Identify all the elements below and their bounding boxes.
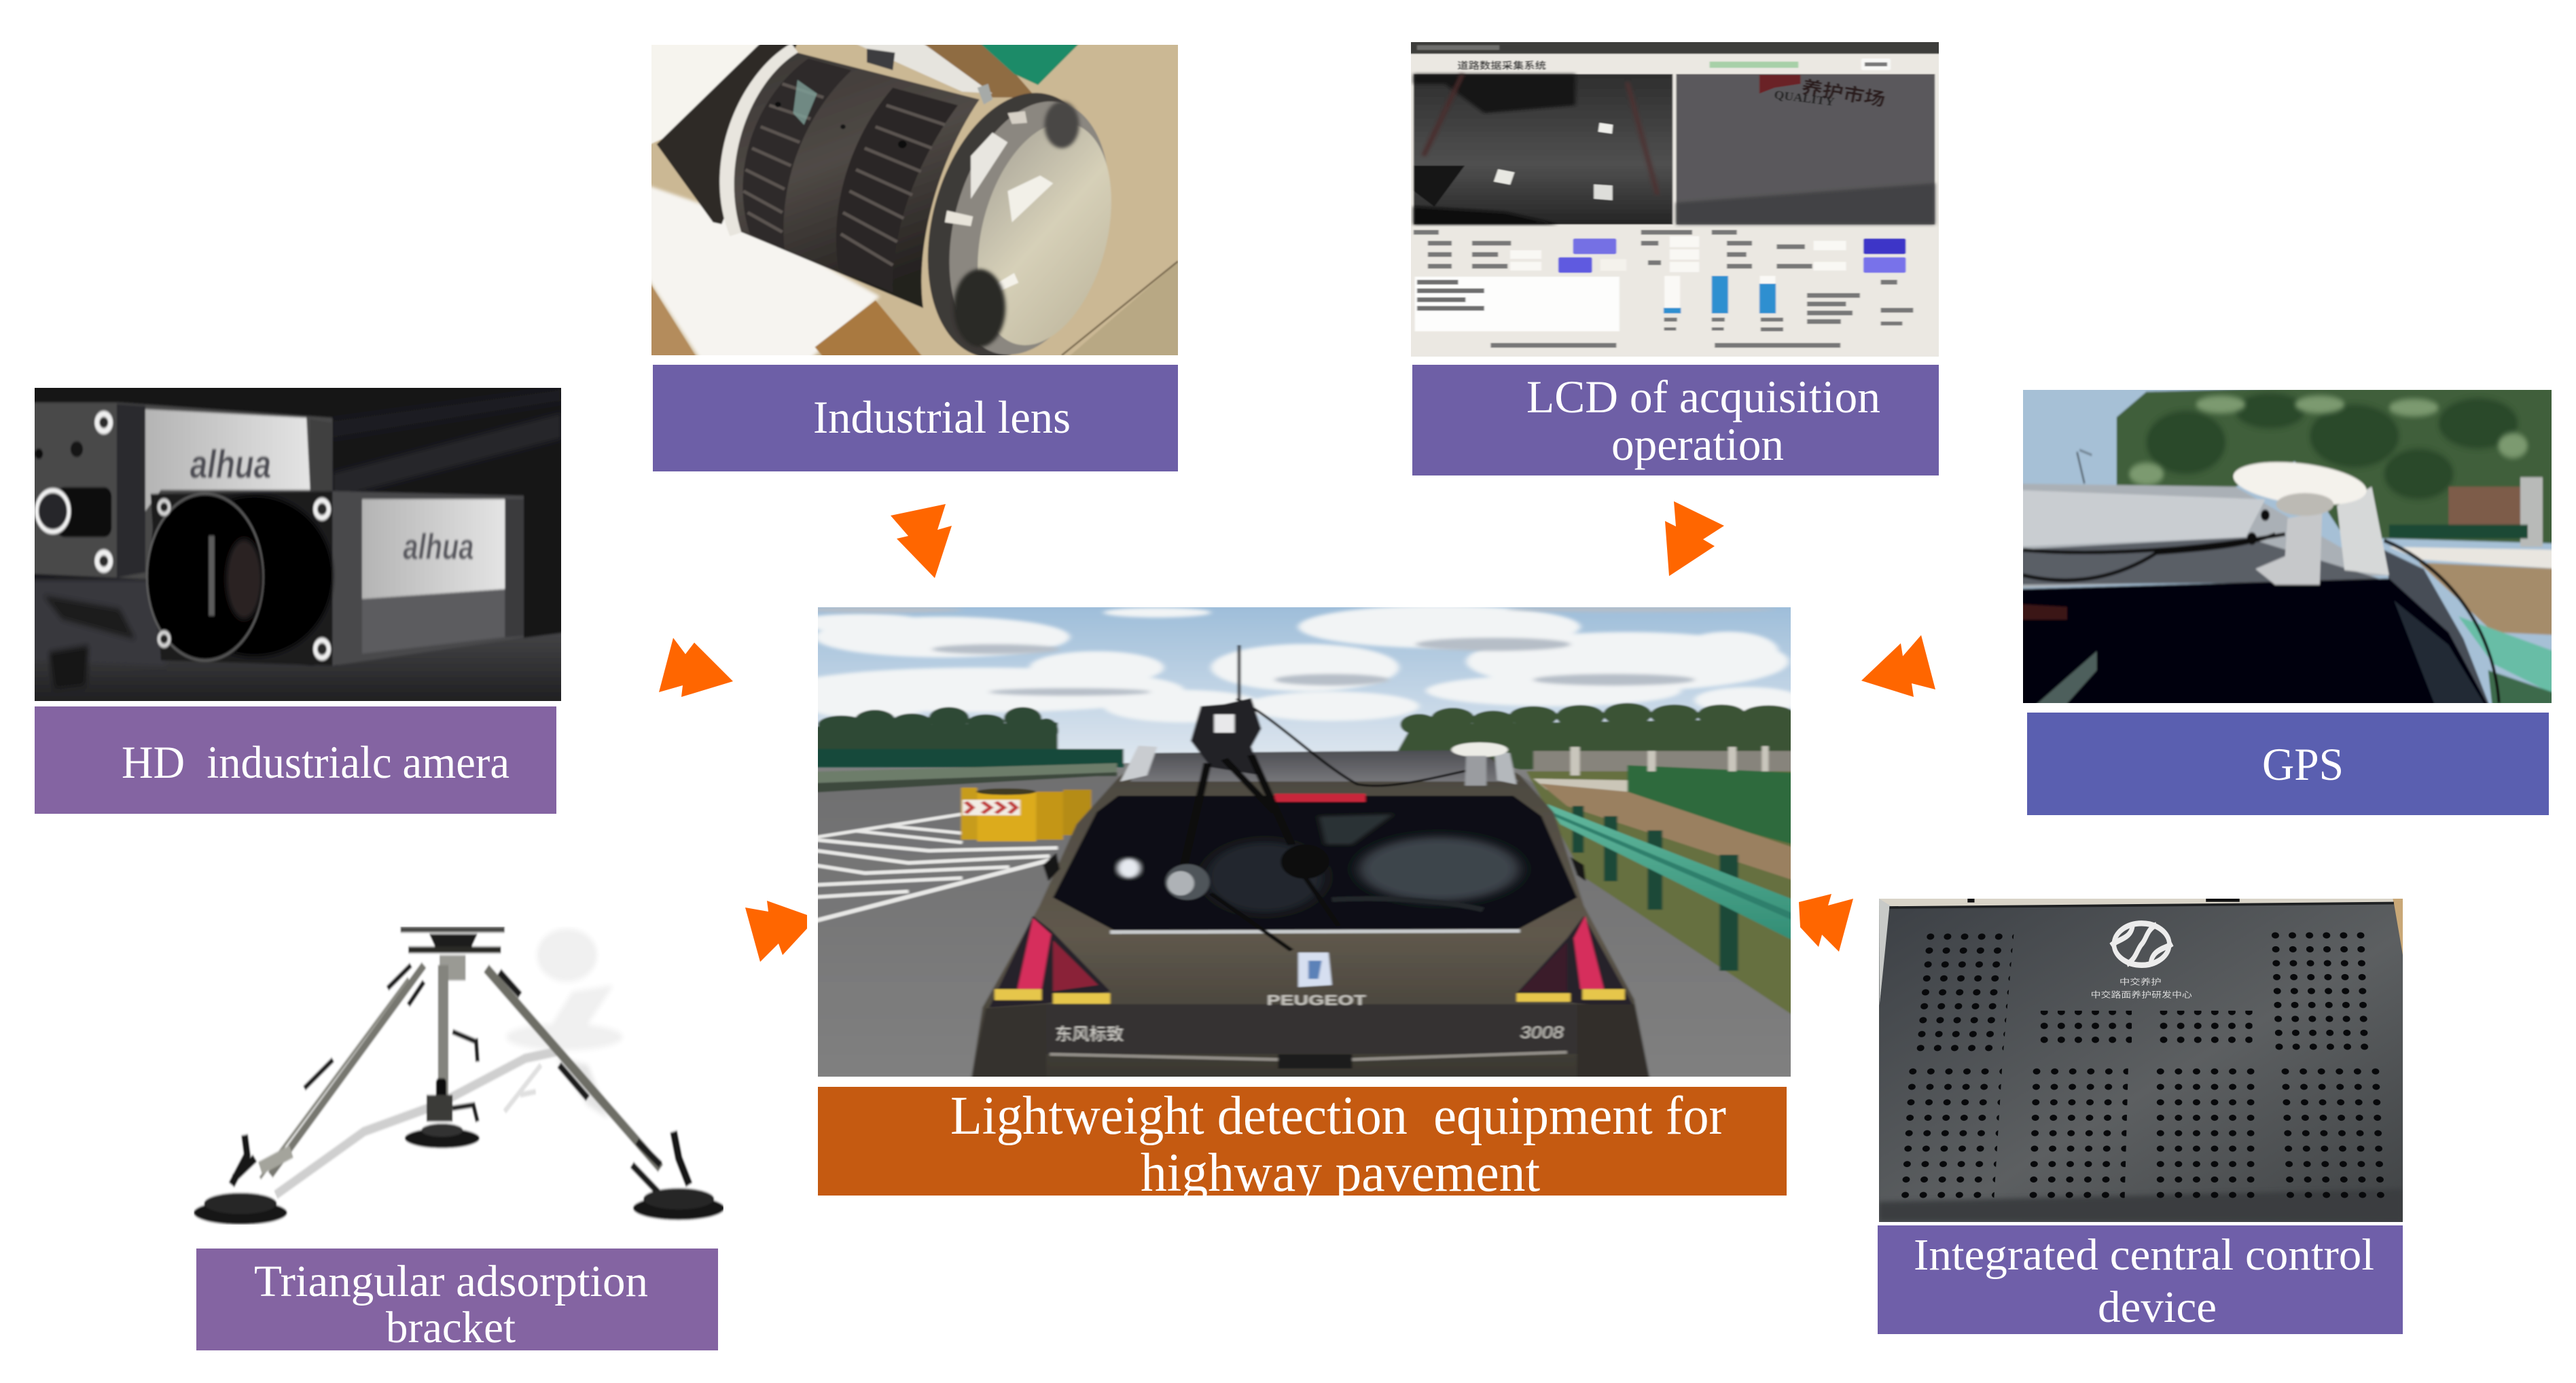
title: lightweight detection equipment for highway pavement xyxy=(818,1086,1787,1203)
panel: integrated central control device xyxy=(1878,899,2403,1334)
label: integrated central control device: device xyxy=(2098,1282,2217,1332)
panel: GPS xyxy=(2013,379,2562,815)
photo: HD industrial camera: alhua xyxy=(403,527,473,567)
photo: control device xyxy=(1879,899,2403,1222)
photo: GPS antenna on car roof xyxy=(2023,390,2552,703)
panel: central lightweight detection equipment xyxy=(781,596,1809,1203)
photo: control device: 中交养护 xyxy=(2119,976,2162,987)
title: lightweight detection equipment for highway pavement: highway pavement xyxy=(1141,1143,1540,1203)
label: LCD of acquisition operation: operation xyxy=(1611,418,1784,470)
photo: LCD acquisition screen: 道路数据采集系统 xyxy=(1457,60,1546,71)
photo: control device: 中交路面养护研发中心 xyxy=(2091,989,2192,1000)
label: triangular adsorption bracket: Triangular adsorption xyxy=(254,1257,648,1306)
panel: industrial lens xyxy=(641,37,1187,471)
arrow: from triangular adsorption bracket xyxy=(745,901,807,962)
photo: detection car on highway: 东风标致 xyxy=(1055,1025,1124,1044)
photo: tripod bracket xyxy=(194,927,723,1225)
photo: HD industrial camera: alhua xyxy=(190,442,271,487)
arrow: from LCD of acquisition operation xyxy=(1665,501,1724,576)
photo: LCD acquisition screen xyxy=(1411,42,1939,357)
label: GPS: GPS xyxy=(2262,738,2344,790)
label: triangular adsorption bracket xyxy=(196,1249,718,1352)
photo: detection car on highway: PEUGEOT xyxy=(1267,992,1366,1009)
label: LCD of acquisition operation: LCD of acquisition xyxy=(1526,371,1880,423)
photo: industrial lens xyxy=(651,45,1178,355)
photo: detection car on highway xyxy=(818,607,1791,1077)
arrow: from industrial lens xyxy=(891,504,952,578)
label: industrial lens: Industrial lens xyxy=(813,391,1071,443)
label: HD industrial camera: HD industrialc amera xyxy=(122,736,509,788)
label: integrated central control device: Integrated central control xyxy=(1914,1230,2374,1280)
photo: LCD acquisition screen: 养护市场 xyxy=(1800,77,1887,110)
label: industrial lens xyxy=(653,365,1178,471)
panel: LCD of acquisition operation xyxy=(1402,35,1948,475)
arrow: from integrated central control device xyxy=(1799,894,1853,952)
label: HD industrial camera xyxy=(35,706,556,814)
label: LCD of acquisition operation xyxy=(1412,365,1939,475)
label: GPS xyxy=(2027,713,2549,815)
arrow: from GPS xyxy=(1861,635,1935,697)
title: lightweight detection equipment for highway pavement: Lightweight detection equipment for xyxy=(950,1086,1726,1146)
panel: triangular adsorption bracket xyxy=(182,912,734,1352)
photo: LCD acquisition screen: QUALITY xyxy=(1773,88,1836,109)
panel: HD industrial camera xyxy=(26,379,571,814)
photo: HD industrial camera xyxy=(35,388,561,701)
photo: detection car on highway: 3008 xyxy=(1520,1024,1564,1043)
arrow: from HD industrial camera xyxy=(659,638,733,697)
label: integrated central control device xyxy=(1878,1225,2403,1334)
label: triangular adsorption bracket: bracket xyxy=(386,1303,516,1352)
